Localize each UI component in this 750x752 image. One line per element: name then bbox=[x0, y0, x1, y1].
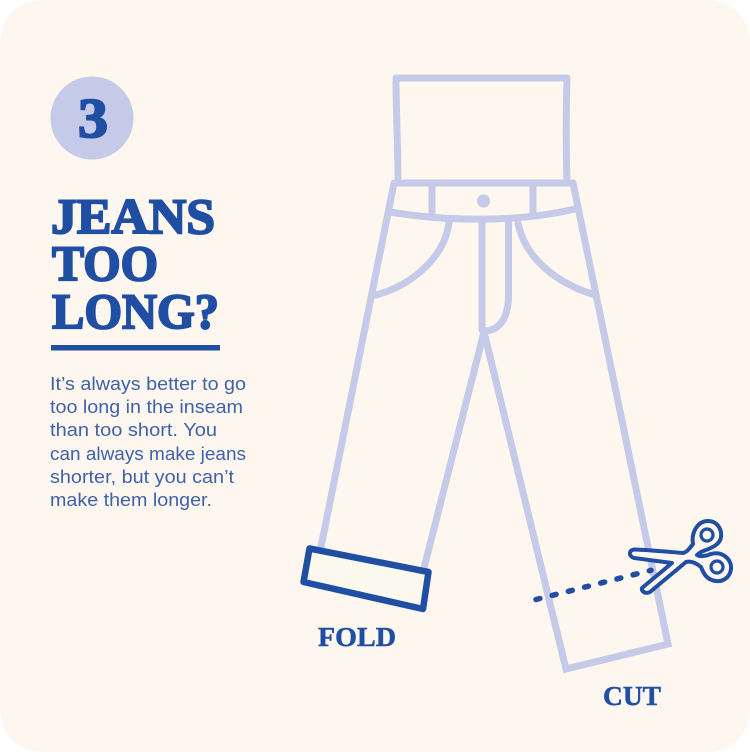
waist extension panel bbox=[396, 78, 567, 183]
number badge: 3 bbox=[78, 88, 108, 150]
title bbox=[51, 188, 219, 339]
body text: can always make jeans bbox=[50, 444, 246, 464]
body text: too long in the inseam bbox=[50, 397, 243, 417]
fly bbox=[482, 222, 508, 331]
title underline bbox=[51, 345, 220, 350]
body text: shorter, but you can’t bbox=[50, 467, 234, 487]
body text: It’s always better to go bbox=[50, 374, 246, 394]
left leg bbox=[321, 183, 484, 568]
button bbox=[477, 194, 490, 208]
cut line bbox=[536, 570, 651, 600]
body text: than too short. You bbox=[50, 420, 217, 440]
folded cuff bbox=[304, 548, 428, 609]
title: LONG? bbox=[52, 283, 219, 339]
label: cut: CUT bbox=[603, 681, 661, 711]
title: JEANS bbox=[51, 188, 215, 244]
title: TOO bbox=[52, 235, 158, 291]
waistband bbox=[390, 183, 575, 219]
body text bbox=[50, 374, 246, 510]
label: fold: FOLD bbox=[318, 622, 396, 652]
right leg bbox=[484, 183, 668, 669]
icon: scissors bbox=[630, 521, 731, 593]
jeans illustration bbox=[321, 78, 668, 669]
number badge bbox=[50, 76, 134, 160]
pockets bbox=[376, 223, 595, 295]
body text: make them longer. bbox=[50, 490, 212, 510]
